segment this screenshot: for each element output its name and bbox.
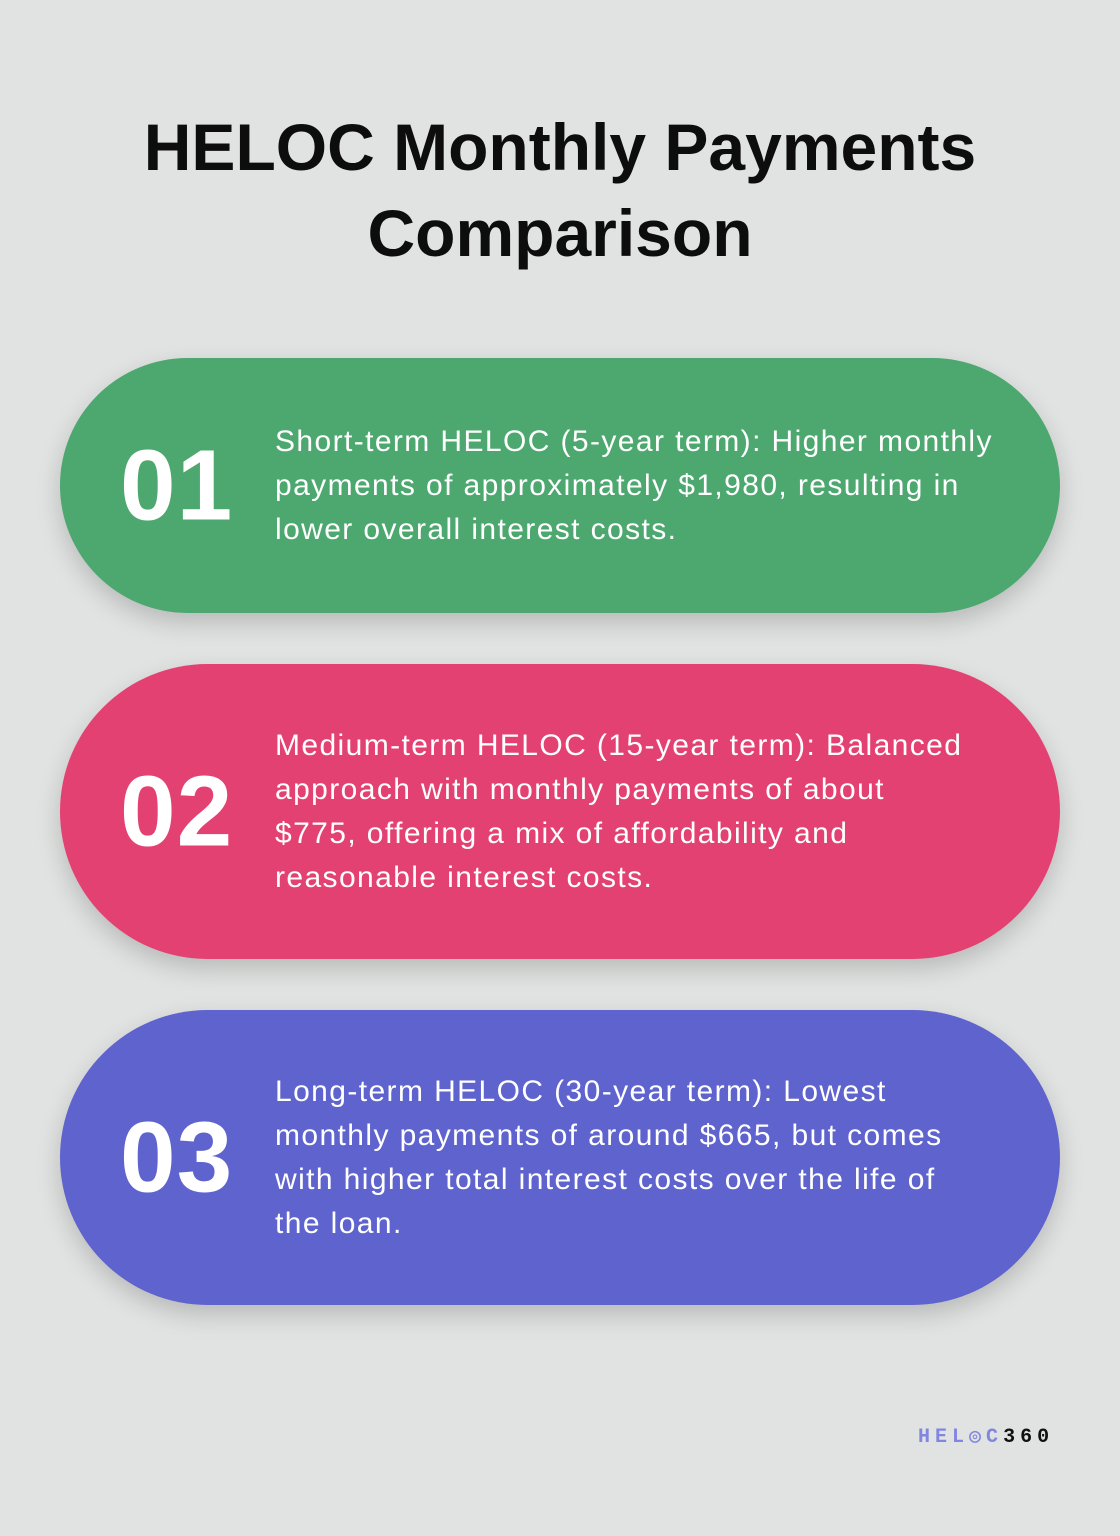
title: HELOC Monthly Payments bbox=[144, 110, 976, 184]
text: medium-term: reasonable interest costs. bbox=[275, 860, 653, 894]
text: long-term: Long-term HELOC (30-year term): Lowest bbox=[275, 1074, 887, 1108]
text: long-term: the loan. bbox=[275, 1206, 403, 1240]
text: long-term: monthly payments of around $665, but comes bbox=[275, 1118, 942, 1152]
number 03: 03 bbox=[120, 1101, 233, 1213]
text: medium-term: Medium-term HELOC (15-year term): Balanced bbox=[275, 728, 962, 762]
text: short-term bbox=[275, 424, 993, 546]
panel: medium-term bbox=[60, 664, 1060, 959]
number 02: 02 bbox=[120, 755, 233, 867]
title: Comparison bbox=[367, 196, 753, 270]
text: medium-term: approach with monthly payments of about bbox=[275, 772, 885, 806]
panel: short-term bbox=[60, 358, 1060, 613]
text: short-term: lower overall interest costs. bbox=[275, 512, 677, 546]
text: medium-term: $775, offering a mix of affordability and bbox=[275, 816, 848, 850]
text: medium-term bbox=[275, 728, 962, 894]
text: short-term: Short-term HELOC (5-year term): Higher monthly bbox=[275, 424, 993, 458]
text: short-term: payments of approximately $1,980, resulting in bbox=[275, 468, 960, 502]
title bbox=[144, 110, 976, 270]
text: long-term bbox=[275, 1074, 942, 1240]
text: long-term: with higher total interest costs over the life of bbox=[275, 1162, 936, 1196]
logo: HEL◎C360 bbox=[918, 1426, 1054, 1449]
number 01: 01 bbox=[120, 429, 233, 541]
panel: long-term bbox=[60, 1010, 1060, 1305]
